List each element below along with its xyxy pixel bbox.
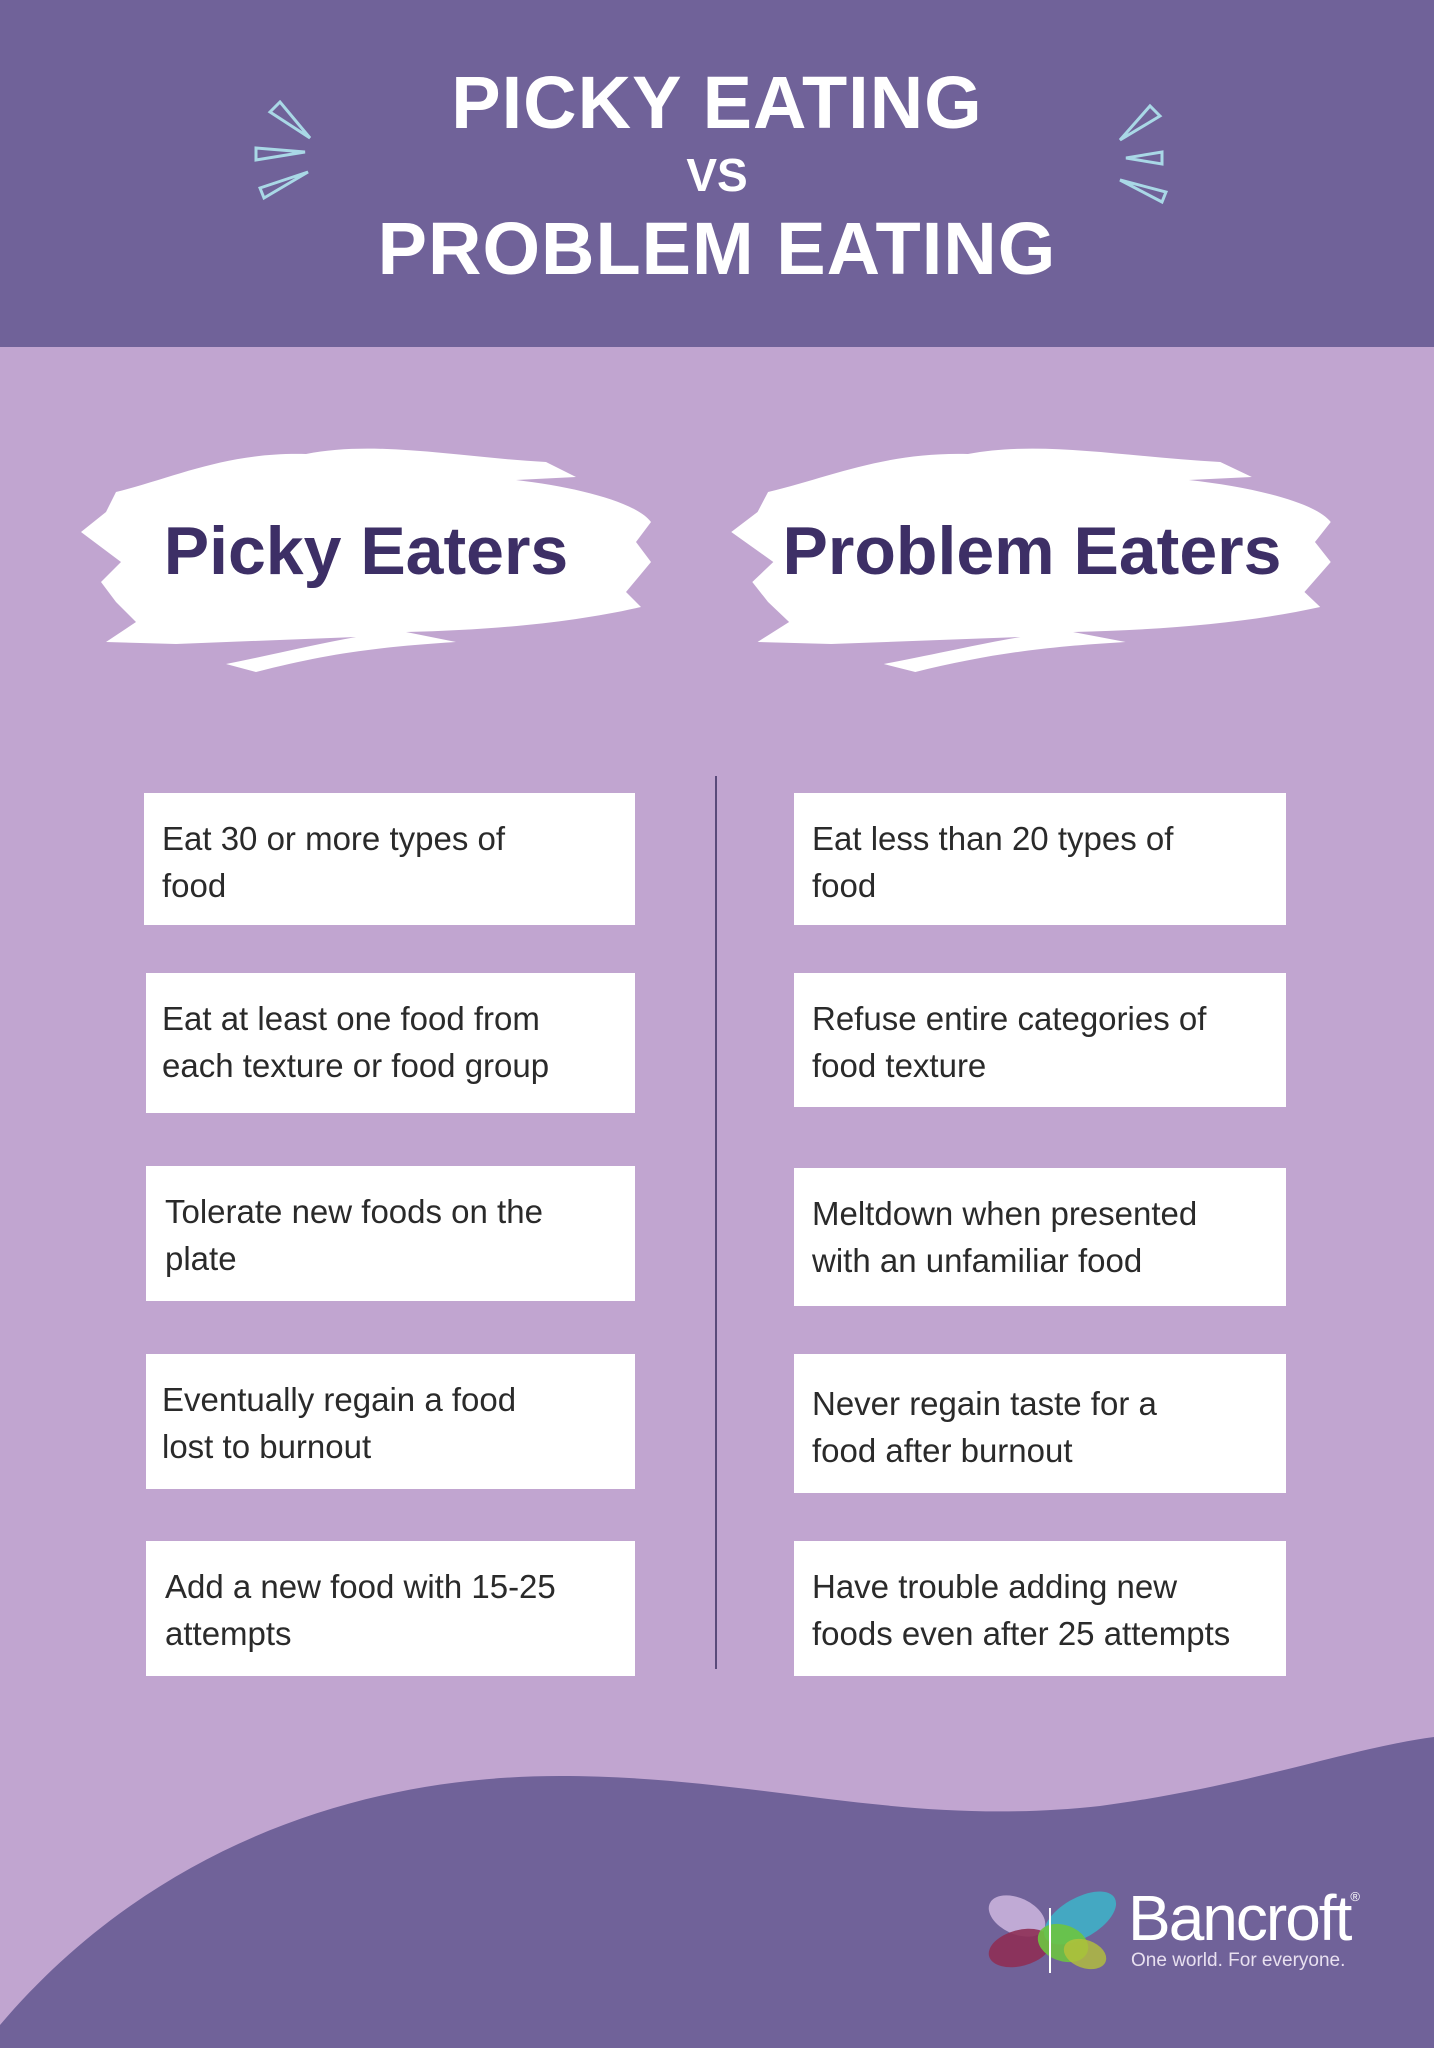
logo: Bancroft: One world. For everyone. xyxy=(1131,1950,1345,1971)
title: PROBLEM EATING xyxy=(378,207,1056,290)
heading: Picky Eaters xyxy=(81,448,651,672)
box: refuse: Refuse entire categories of xyxy=(812,1000,1206,1037)
header band xyxy=(0,0,1434,347)
box: 15-25: Add a new food with 15-25 xyxy=(165,1568,556,1605)
box: less than 20: food xyxy=(812,867,876,904)
box: trouble xyxy=(794,1541,1286,1676)
logo: Bancroft xyxy=(988,1882,1360,1973)
box: 30 or more: Eat 30 or more types of xyxy=(162,820,505,857)
box: tolerate xyxy=(146,1166,635,1301)
box: tolerate: plate xyxy=(165,1240,237,1277)
heading: Problem Eaters xyxy=(732,448,1331,672)
heading: Problem Eaters: Problem Eaters xyxy=(783,513,1281,589)
box: trouble: Have trouble adding new xyxy=(812,1568,1177,1605)
box: texture group: each texture or food group xyxy=(162,1047,549,1084)
box: 30 or more: food xyxy=(162,867,226,904)
box: meltdown: Meltdown when presented xyxy=(812,1195,1197,1232)
box: never regain: food after burnout xyxy=(812,1432,1073,1469)
icon: left sparkle marks xyxy=(254,100,311,200)
box: meltdown: with an unfamiliar food xyxy=(812,1242,1142,1279)
box: 15-25 xyxy=(146,1541,635,1676)
box: refuse: food texture xyxy=(812,1047,986,1084)
bottom wave xyxy=(0,1737,1434,2048)
title xyxy=(378,61,1056,290)
box: regain xyxy=(146,1354,635,1489)
box: 15-25: attempts xyxy=(165,1615,292,1652)
heading: Picky Eaters: Picky Eaters xyxy=(164,513,568,589)
box: never regain xyxy=(794,1354,1286,1493)
box: texture group: Eat at least one food from xyxy=(162,1000,540,1037)
logo: Bancroft: Bancroft® xyxy=(1128,1882,1360,1954)
divider xyxy=(715,776,717,1669)
icon: right sparkle marks xyxy=(1119,104,1168,204)
box: less than 20: Eat less than 20 types of xyxy=(812,820,1173,857)
box: meltdown xyxy=(794,1168,1286,1306)
title: VS xyxy=(686,149,748,201)
box: 30 or more xyxy=(144,793,635,925)
box: never regain: Never regain taste for a xyxy=(812,1385,1157,1422)
box: trouble: foods even after 25 attempts xyxy=(812,1615,1230,1652)
box: texture group xyxy=(146,973,635,1113)
box: refuse xyxy=(794,973,1286,1107)
left column boxes xyxy=(144,793,635,1676)
box: regain: lost to burnout xyxy=(162,1428,371,1465)
box: less than 20 xyxy=(794,793,1286,925)
box: regain: Eventually regain a food xyxy=(162,1381,516,1418)
right column boxes xyxy=(794,793,1286,1676)
box: tolerate: Tolerate new foods on the xyxy=(165,1193,543,1230)
title: PICKY EATING xyxy=(451,61,983,144)
